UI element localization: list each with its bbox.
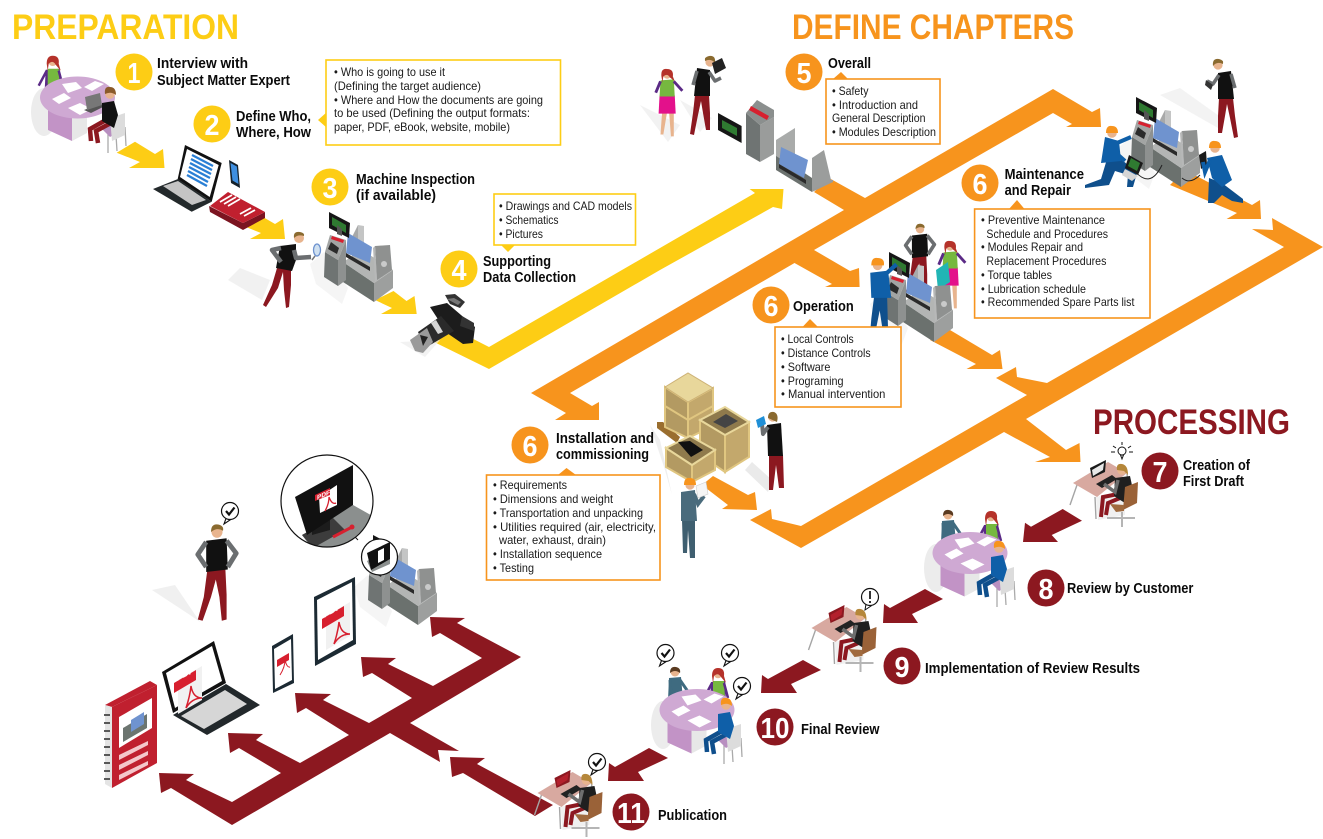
- step 3 number badge: 3: [322, 173, 338, 205]
- step 2 number badge: [194, 106, 230, 142]
- step 4 number badge: [440, 250, 478, 288]
- step 7 label: Creation of: [1183, 458, 1250, 474]
- step 2: laptop, phone and book: [153, 145, 265, 230]
- step 7 label: [1183, 458, 1250, 490]
- callout: supporting data: • Drawings and CAD models: [499, 199, 632, 213]
- step 7: creation desk and lightbulb: [1070, 442, 1138, 527]
- output: laptop: PDF: [177, 665, 194, 683]
- step 1: interview illustration: [31, 56, 126, 153]
- callout: maintenance: • Preventive Maintenance: [981, 213, 1105, 227]
- callout: overall: • Modules Description: [832, 125, 936, 139]
- output: printed manual: [104, 681, 157, 788]
- callout: maintenance: Replacement Procedures: [986, 254, 1106, 268]
- step 4 number badge: 4: [452, 255, 466, 287]
- step 9 number badge: [884, 648, 920, 684]
- installation: crates and people: [650, 373, 784, 558]
- callout: installation: • Testing: [493, 561, 534, 575]
- callout: operation: • Distance Controls: [781, 346, 871, 360]
- step 6 maintenance badge: [962, 164, 998, 202]
- step 1 number badge: 1: [128, 58, 140, 90]
- callout: operation: • Manual intervention: [781, 387, 885, 401]
- step 3 label: Machine Inspection: [356, 172, 475, 188]
- callout: overall: [826, 72, 940, 144]
- step 6 maintenance label: and Repair: [1005, 183, 1071, 199]
- step 2 label: Define Who,: [236, 109, 311, 125]
- step 3: machine: [310, 212, 393, 304]
- step 3 number badge: [312, 168, 348, 206]
- callout: who where how: • Where and How the documents are going: [334, 93, 543, 107]
- arrows: define chapters flow: [531, 89, 1323, 548]
- step 2 number badge: 2: [204, 110, 220, 142]
- step 9: implementation desk with alert bubble: [808, 588, 878, 672]
- output: tablet: PDF: [324, 601, 341, 620]
- step 3 label: [356, 172, 475, 204]
- callout: supporting data: • Pictures: [499, 227, 543, 241]
- callout: maintenance: Schedule and Procedures: [986, 227, 1108, 241]
- callout: supporting data: • Schematics: [499, 213, 559, 227]
- step 9 number badge: 9: [894, 652, 910, 684]
- step 8: customer review table: [924, 510, 1015, 607]
- callout: installation: • Installation sequence: [493, 547, 602, 561]
- step 5: people and disassembled machine: [640, 56, 833, 192]
- callout: supporting data: [494, 194, 636, 252]
- step 6 operation label: Operation: [793, 299, 854, 315]
- step 10 number badge: 10: [760, 713, 790, 745]
- arrows: preparation flow: [117, 142, 783, 369]
- step 7 label: First Draft: [1183, 474, 1244, 490]
- step 6 operation badge: [752, 286, 790, 324]
- step 6 maintenance badge: 6: [972, 169, 988, 201]
- callout: installation: • Utilities required (air, electricity,: [493, 520, 656, 534]
- step 7 number badge: 7: [1152, 457, 1168, 489]
- callout: operation: • Software: [781, 360, 831, 374]
- arrows: processing flow: [608, 509, 1082, 781]
- callout: who where how: [318, 60, 560, 145]
- step 5 number badge: 5: [796, 58, 812, 90]
- output: tablet: [314, 577, 356, 666]
- callout: who where how: (Defining the target audience): [334, 79, 481, 93]
- callout: operation: [775, 319, 901, 407]
- callout: installation: • Requirements: [493, 478, 567, 492]
- callout: overall: • Introduction and: [832, 98, 918, 112]
- callout: overall: General Description: [832, 111, 926, 125]
- callout: maintenance: • Modules Repair and: [981, 240, 1083, 254]
- callout: installation: [486, 468, 660, 580]
- step 3: inspector with magnifier: [228, 232, 320, 308]
- output: satisfied person: [152, 502, 238, 622]
- callout: maintenance: • Torque tables: [981, 268, 1052, 282]
- title: preparation: PREPARATION: [12, 8, 239, 47]
- step 11 number badge: 11: [617, 798, 645, 830]
- step 4 label: Data Collection: [483, 270, 576, 286]
- arrows: publication distribution: [159, 617, 553, 825]
- output: machine with monitor magnifier: PDF: [317, 489, 330, 502]
- step 2 label: Where, How: [236, 125, 312, 141]
- callout: installation: • Transportation and unpacking: [493, 506, 643, 520]
- step 10: final review table with approvals: [651, 644, 750, 764]
- step 5 number badge: [786, 54, 822, 90]
- title: define chapters: DEFINE CHAPTERS: [792, 8, 1074, 47]
- step 1 label: Interview with: [157, 56, 248, 72]
- step 1 label: Subject Matter Expert: [157, 73, 290, 89]
- callout: operation: • Local Controls: [781, 332, 854, 346]
- callout: installation: water, exhaust, drain): [498, 533, 606, 547]
- title: processing: PROCESSING: [1093, 403, 1290, 442]
- callout: maintenance: [975, 200, 1150, 318]
- step 6 installation label: commissioning: [556, 447, 649, 463]
- step 6 installation label: Installation and: [556, 431, 654, 447]
- step 3 label: (if available): [356, 188, 436, 204]
- step 10 label: Final Review: [801, 722, 880, 738]
- callout: maintenance: • Recommended Spare Parts list: [981, 295, 1135, 309]
- step 6 installation badge: [512, 426, 548, 464]
- output: laptop: [162, 641, 260, 735]
- step 5 label: Overall: [828, 56, 871, 72]
- step 2 label: [236, 109, 312, 141]
- operation: machine and people: [870, 224, 965, 344]
- step 8 number badge: 8: [1038, 574, 1054, 606]
- step 8 label: Review by Customer: [1067, 581, 1194, 597]
- step 6 maintenance label: Maintenance: [1005, 167, 1084, 183]
- callout: who where how: • Who is going to use it: [334, 65, 446, 79]
- step 11 label: Publication: [658, 808, 727, 824]
- output: machine with monitor magnifier: [281, 455, 437, 627]
- step 11: publication desk: [534, 754, 606, 837]
- callout: who where how: paper, PDF, eBook, website, mobile): [334, 120, 510, 134]
- callout: who where how: to be used (Defining the output formats:: [334, 106, 530, 120]
- step 4 label: [483, 254, 576, 286]
- step 4 label: Supporting: [483, 254, 551, 270]
- step 9 label: Implementation of Review Results: [925, 661, 1140, 677]
- step 6 maintenance label: [1005, 167, 1084, 199]
- step 4: camera: [400, 294, 475, 357]
- maintenance: machine and technicians: [1085, 59, 1243, 203]
- callout: installation: • Dimensions and weight: [493, 492, 614, 506]
- callout: operation: • Programing: [781, 374, 844, 388]
- step 1 label: [157, 56, 290, 89]
- step 6 installation label: [556, 431, 654, 463]
- step 6 operation badge: 6: [764, 291, 778, 323]
- callout: overall: • Safety: [832, 84, 869, 98]
- step 1 number badge: [116, 54, 152, 90]
- step 7 number badge: [1142, 452, 1178, 490]
- step 8 number badge: [1028, 570, 1064, 606]
- output: phone: [272, 634, 294, 693]
- step 6 installation badge: 6: [522, 431, 538, 463]
- callout: maintenance: • Lubrication schedule: [981, 282, 1086, 296]
